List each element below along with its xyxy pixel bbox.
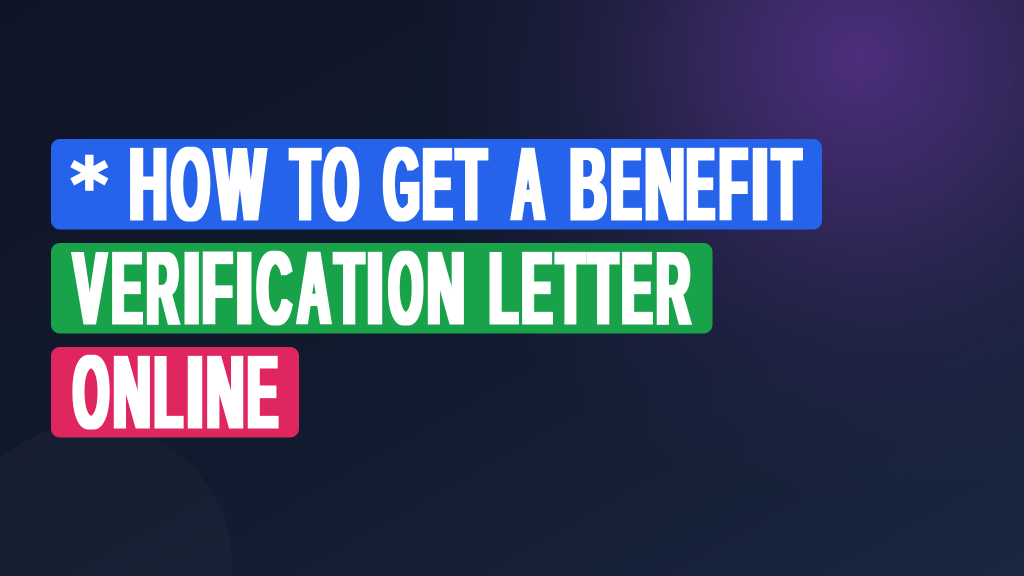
title line 1: blue banner: H xyxy=(129,126,167,242)
title line 1: blue banner: O xyxy=(323,126,358,242)
title line 2: green banner: I xyxy=(183,230,200,346)
title line 3: pink banner: O xyxy=(73,334,109,450)
title line 3: pink banner: N xyxy=(113,334,151,450)
title line 2: green banner: I xyxy=(236,230,253,346)
decorative circle bottom left xyxy=(0,424,232,576)
title line 1: blue banner: E xyxy=(687,126,714,242)
title line 3: pink banner: N xyxy=(206,334,244,450)
title line 1: blue banner: E xyxy=(611,126,641,242)
title line 1: blue banner: N xyxy=(645,126,685,242)
title line 2: green banner: E xyxy=(622,230,652,346)
title line 2: green banner: A xyxy=(298,230,330,346)
title line 1: blue banner: A xyxy=(512,126,544,242)
title line 1: blue banner: B xyxy=(570,126,607,242)
title line 2: green banner: L xyxy=(489,230,518,346)
title line 2: green banner: V xyxy=(74,230,106,346)
title line 2: green banner: F xyxy=(202,230,232,346)
title line 1: blue banner: O xyxy=(171,126,210,242)
title line 1: blue banner xyxy=(51,126,822,242)
title line 2: green banner xyxy=(51,230,712,346)
title line 2: green banner: T xyxy=(589,230,618,346)
title line 2: green banner: T xyxy=(335,230,364,346)
title line 1: blue banner: * xyxy=(70,142,108,226)
title line 2: green banner: R xyxy=(656,230,690,346)
title line 2: green banner: E xyxy=(522,230,552,346)
title line 1: blue banner: T xyxy=(456,126,486,242)
title line 2: green banner: R xyxy=(147,230,179,346)
title line 3: pink banner xyxy=(51,334,299,450)
title line 3: pink banner: L xyxy=(154,334,182,450)
title line 1: blue banner: T xyxy=(291,126,320,242)
title line 1: blue banner: W xyxy=(215,126,265,242)
title line 2: green banner: T xyxy=(557,230,584,346)
title line 1: blue banner: G xyxy=(384,126,420,242)
title line 2: green banner: O xyxy=(389,230,423,346)
title line 1: blue banner: F xyxy=(719,126,747,242)
title line 1: blue banner: I xyxy=(751,126,768,242)
title line 2: green banner: E xyxy=(112,230,142,346)
title line 1: blue banner: T xyxy=(773,126,801,242)
title line 2: green banner: N xyxy=(427,230,465,346)
title line 2: green banner: C xyxy=(257,230,292,346)
title line 3: pink banner: I xyxy=(186,334,203,450)
title line 2: green banner: I xyxy=(366,230,383,346)
title line 3: pink banner: E xyxy=(248,334,278,450)
title line 1: blue banner: E xyxy=(423,126,452,242)
